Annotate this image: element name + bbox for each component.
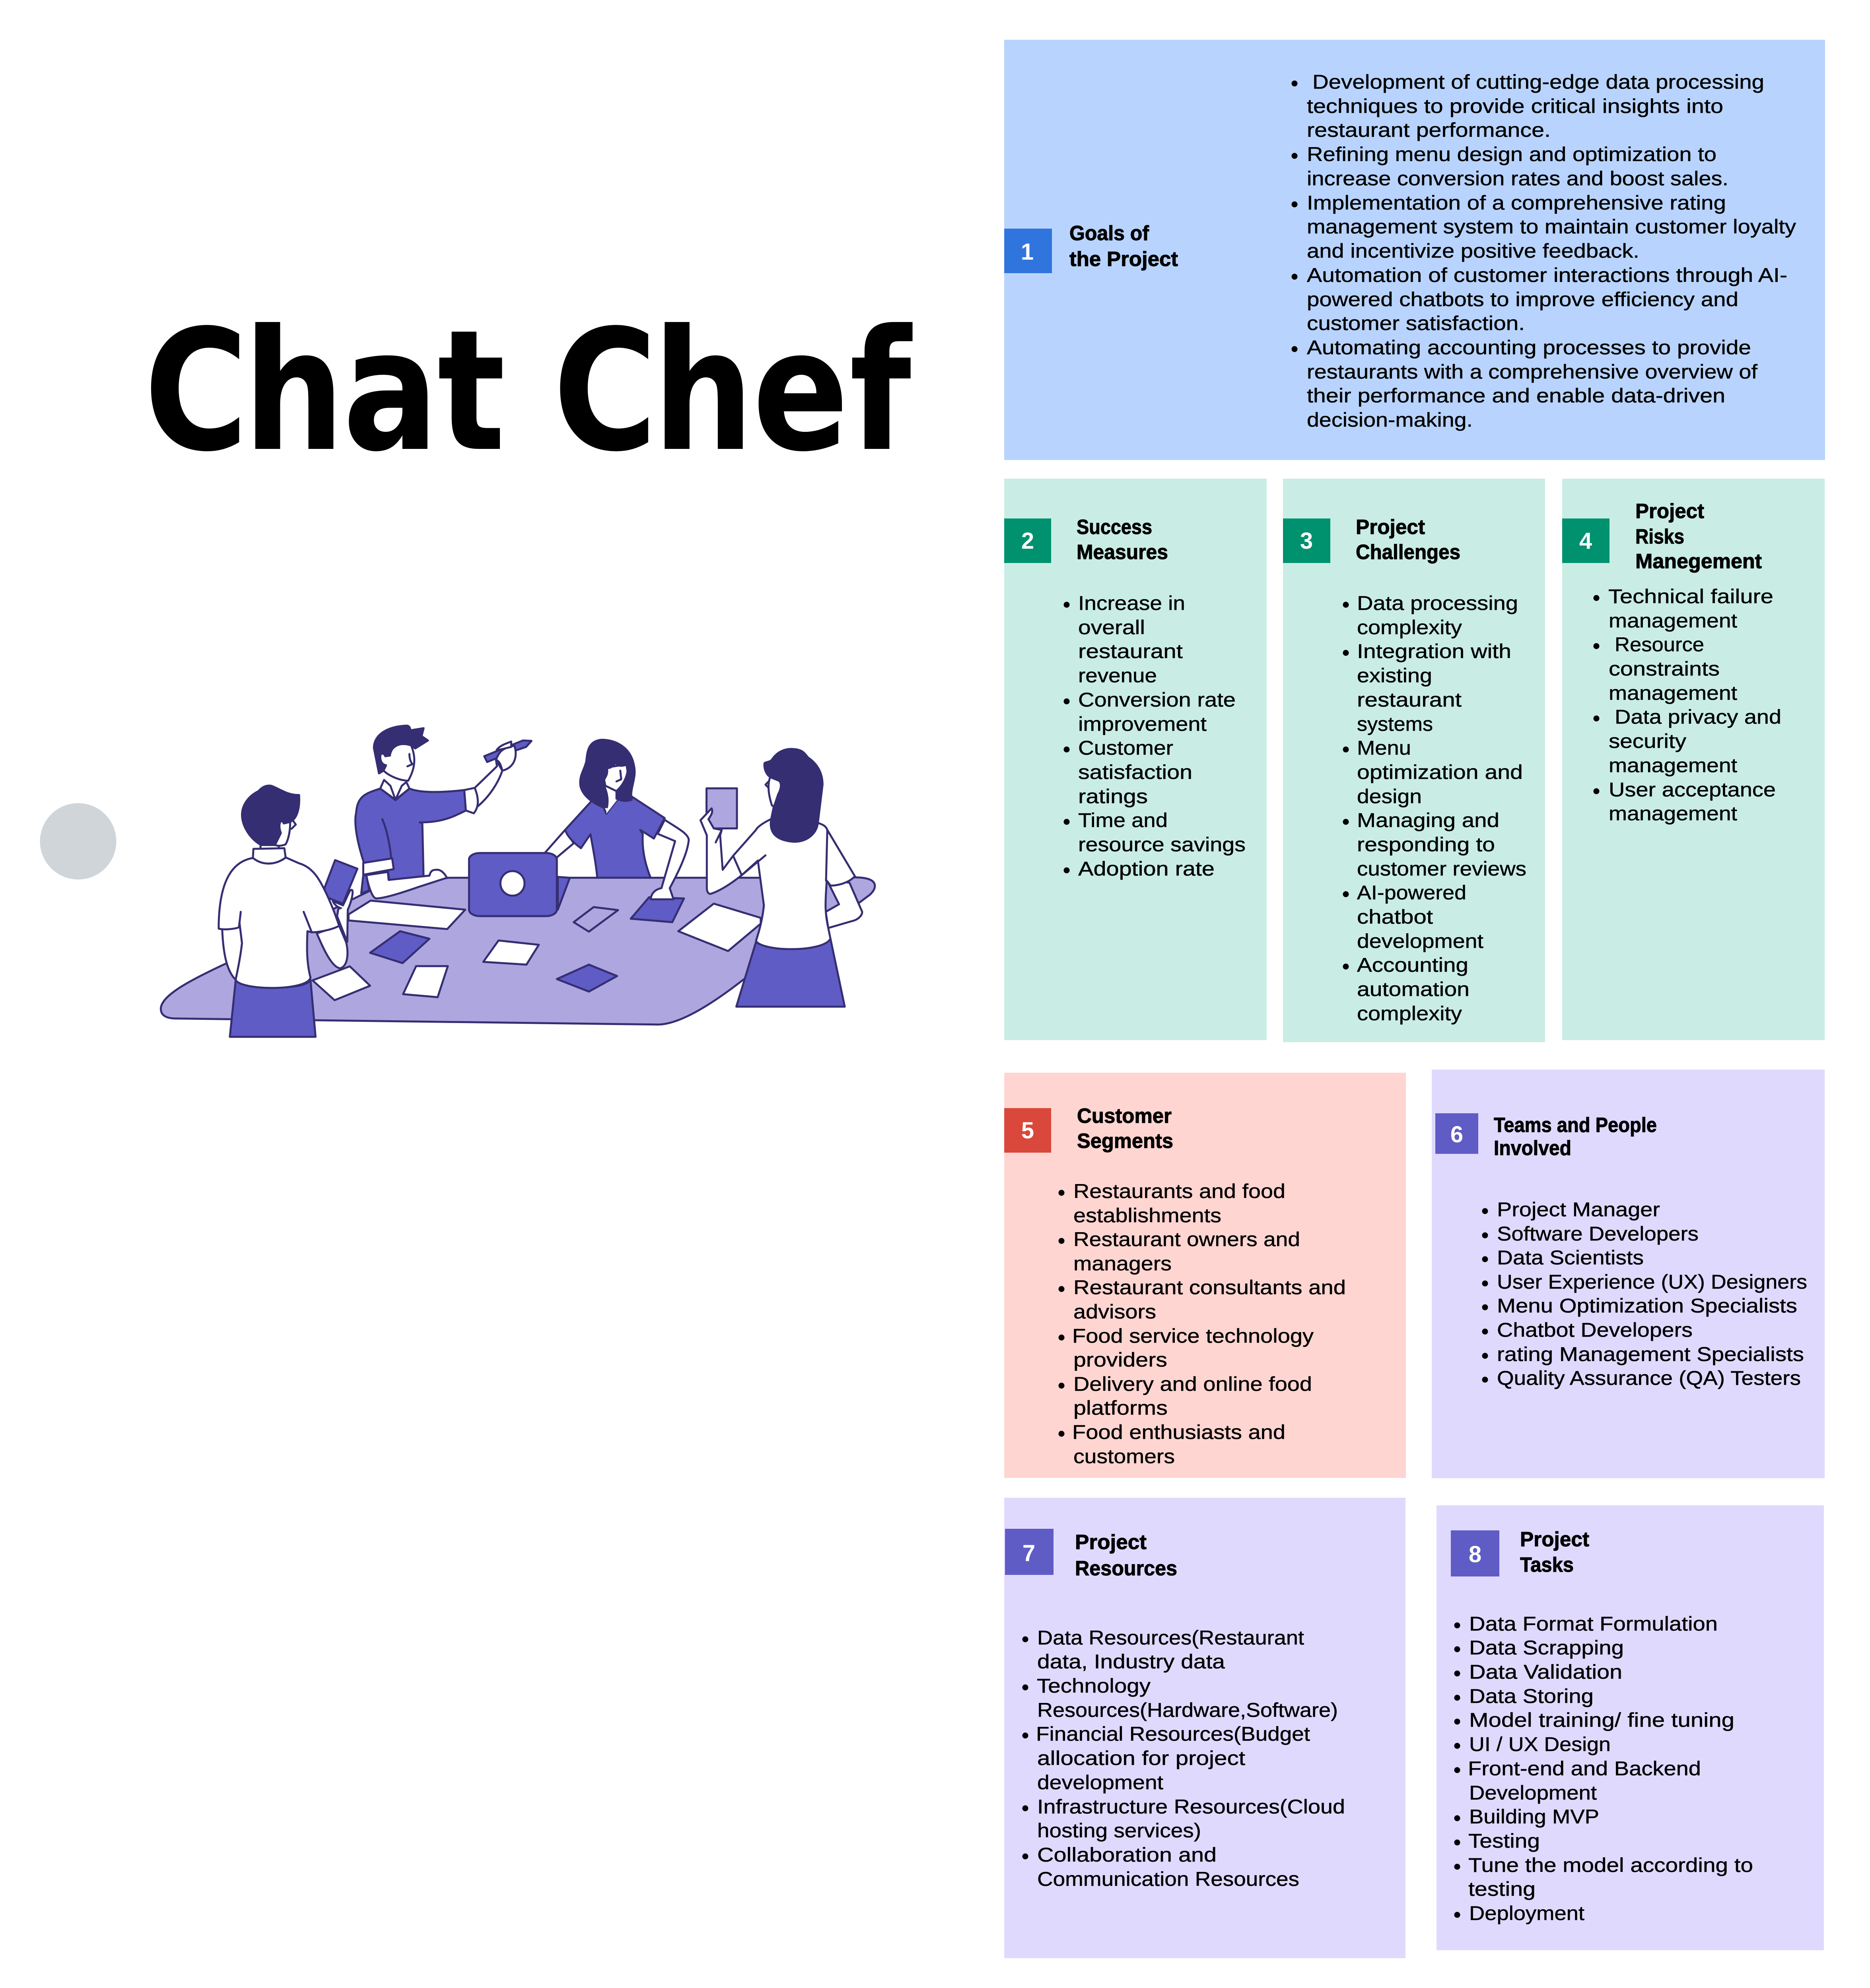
bullet list: existing xyxy=(1357,664,1432,687)
laptop xyxy=(469,853,570,916)
panel background xyxy=(1004,479,1267,1040)
bullet list: design xyxy=(1357,785,1422,808)
bullet list: restaurants with a comprehensive overview of xyxy=(1307,361,1757,383)
number badge 8 xyxy=(1451,1530,1499,1576)
heading xyxy=(1494,1114,1657,1160)
bullet list: Menu xyxy=(1357,737,1411,759)
panel 2: success measures xyxy=(1004,479,1267,1040)
paper: long white sheet xyxy=(348,901,465,929)
heading: Measures xyxy=(1077,541,1168,564)
bullet list xyxy=(1022,1627,1345,1890)
number badge 3 xyxy=(1283,518,1330,563)
heading: Tasks xyxy=(1520,1553,1574,1576)
bullet list: decision-making. xyxy=(1307,409,1473,431)
bullet list: Data processing xyxy=(1357,592,1518,614)
bullet list: Software Developers xyxy=(1497,1223,1699,1245)
number badge 7: 7 xyxy=(1022,1540,1035,1566)
bullet list: Data Storing xyxy=(1469,1685,1594,1707)
bullet list: restaurant performance. xyxy=(1307,119,1551,141)
man's shirt cuff xyxy=(363,858,394,875)
bullet list xyxy=(1454,1613,1753,1924)
panel 1: goals of the project xyxy=(1004,40,1825,460)
bullet list: Food enthusiasts and xyxy=(1072,1421,1285,1443)
person: man's raised arm and pen xyxy=(464,740,531,813)
heading: Teams and People xyxy=(1494,1114,1657,1137)
panel background xyxy=(1004,1073,1406,1478)
bullet list: data, Industry data xyxy=(1037,1650,1225,1673)
bullet list: Tune the model according to xyxy=(1468,1854,1753,1876)
paper: white square xyxy=(483,940,539,965)
panel background xyxy=(1004,40,1825,460)
panel background xyxy=(1437,1505,1824,1950)
paper: outline card xyxy=(573,907,618,932)
number badge 4: 4 xyxy=(1579,528,1592,554)
bullet list: development xyxy=(1037,1771,1163,1794)
bullet list: Financial Resources(Budget xyxy=(1036,1723,1310,1745)
heading xyxy=(1077,516,1168,564)
bullet list: Collaboration and xyxy=(1037,1844,1217,1866)
bullet list: customer satisfaction. xyxy=(1307,312,1525,334)
bullet list xyxy=(1292,71,1796,431)
bullet list: customers xyxy=(1073,1445,1175,1468)
heading: Resources xyxy=(1075,1557,1177,1580)
bullet list: Resource xyxy=(1615,633,1704,656)
bullet list xyxy=(1059,1180,1346,1468)
bullet list: testing xyxy=(1468,1878,1536,1900)
bullet list: complexity xyxy=(1357,616,1462,639)
bullet list: revenue xyxy=(1078,664,1157,687)
bullet list: management xyxy=(1609,682,1737,704)
bullet list: satisfaction xyxy=(1078,761,1192,783)
bullet list: security xyxy=(1609,730,1686,752)
bullet list: Restaurant consultants and xyxy=(1073,1276,1346,1299)
heading: Project xyxy=(1356,516,1425,539)
heading: Manegement xyxy=(1635,550,1762,573)
bullet list: providers xyxy=(1073,1349,1167,1371)
title: Chat Chef xyxy=(144,294,914,488)
bullet list: Development of cutting-edge data processing xyxy=(1312,71,1764,93)
bullet list: ratings xyxy=(1078,785,1148,808)
bullet list: increase conversion rates and boost sales. xyxy=(1307,167,1728,190)
bullet list: powered chatbots to improve efficiency and xyxy=(1307,288,1738,311)
bullet list xyxy=(1063,592,1246,880)
bullet list: advisors xyxy=(1073,1301,1156,1323)
bullet list: AI-powered xyxy=(1357,881,1466,904)
bullet list xyxy=(1593,585,1781,825)
bullet list: overall xyxy=(1078,616,1145,639)
bullet list xyxy=(1482,1198,1807,1389)
bullet list: development xyxy=(1357,930,1483,952)
heading: the Project xyxy=(1069,248,1178,271)
bullet list: restaurant xyxy=(1078,640,1183,662)
bullet list: Delivery and online food xyxy=(1073,1373,1312,1395)
bullet list: management xyxy=(1609,754,1737,777)
bullet list: Menu Optimization Specialists xyxy=(1497,1295,1797,1317)
decorative grey circle xyxy=(40,803,116,879)
panel 6: teams and people involved xyxy=(1432,1070,1825,1478)
table top xyxy=(161,858,875,1025)
bullet list xyxy=(1343,592,1526,1025)
number badge 1: 1 xyxy=(1021,239,1034,265)
bullet list: Restaurants and food xyxy=(1073,1180,1285,1202)
illustration: team around a table xyxy=(161,726,875,1037)
bullet list: Conversion rate xyxy=(1078,689,1236,711)
heading xyxy=(1069,222,1178,271)
bullet list: Data Scrapping xyxy=(1469,1637,1624,1659)
bullet list: UI / UX Design xyxy=(1469,1733,1611,1755)
bullet list: Quality Assurance (QA) Testers xyxy=(1497,1367,1801,1389)
heading xyxy=(1635,500,1762,573)
paper: blue diamond xyxy=(557,965,617,992)
paper: white card lower xyxy=(403,966,448,997)
heading: Project xyxy=(1075,1531,1147,1554)
tablet in hand xyxy=(325,860,358,904)
person: woman holding a card xyxy=(700,749,862,1007)
heading: Project xyxy=(1520,1528,1589,1551)
panel background xyxy=(1432,1070,1825,1478)
bullet list: Model training/ fine tuning xyxy=(1469,1709,1734,1731)
bullet list: management xyxy=(1609,610,1737,632)
bullet list: rating Management Specialists xyxy=(1497,1343,1804,1365)
number badge 1 xyxy=(1004,229,1052,273)
bullet list: Restaurant owners and xyxy=(1073,1228,1300,1250)
panel 7: project resources xyxy=(1004,1498,1405,1958)
panel 4: project risks management xyxy=(1562,479,1825,1040)
heading: Challenges xyxy=(1356,541,1460,564)
number badge 4 xyxy=(1562,518,1610,563)
number badge 6: 6 xyxy=(1450,1122,1463,1147)
heading: Success xyxy=(1077,516,1152,539)
number badge 2 xyxy=(1004,518,1051,563)
bullet list: Testing xyxy=(1468,1830,1540,1852)
bullet list: responding to xyxy=(1357,833,1495,856)
bullet list: Adoption rate xyxy=(1078,858,1215,880)
bullet list: Resources(Hardware,Software) xyxy=(1037,1699,1338,1721)
number badge 6 xyxy=(1435,1113,1478,1154)
held card xyxy=(706,788,737,829)
person: woman in the middle xyxy=(545,740,665,879)
person: man with pen, upper body xyxy=(356,726,466,880)
bullet list: restaurant xyxy=(1357,689,1462,711)
paper: large white sheet right xyxy=(678,904,761,951)
woman's arm on table xyxy=(651,820,689,899)
bullet list: allocation for project xyxy=(1037,1747,1245,1769)
heading: Segments xyxy=(1077,1130,1173,1153)
bullet list: managers xyxy=(1073,1252,1172,1275)
number badge 8: 8 xyxy=(1469,1541,1481,1567)
heading: Customer xyxy=(1077,1105,1172,1128)
bullet list: constraints xyxy=(1609,658,1720,680)
bullet list: platforms xyxy=(1073,1397,1168,1419)
table objects xyxy=(403,820,761,997)
bullet list: management system to maintain customer loyalty xyxy=(1307,215,1796,238)
bullet list: resource savings xyxy=(1078,833,1246,856)
paper: white sheet by man xyxy=(313,966,370,1000)
man's forearm on table xyxy=(366,870,447,899)
bullet list: chatbot xyxy=(1357,906,1433,928)
paper: blue card under hand xyxy=(631,897,684,922)
bullet list: Technical failure xyxy=(1608,585,1773,608)
bullet list: Development xyxy=(1469,1782,1597,1804)
bullet list: Time and xyxy=(1078,809,1168,831)
bullet list: Building MVP xyxy=(1469,1806,1599,1828)
bullet list: Customer xyxy=(1078,737,1173,759)
bullet list: establishments xyxy=(1073,1204,1221,1227)
heading: Project xyxy=(1635,500,1704,523)
bullet list: Data Validation xyxy=(1469,1661,1622,1683)
bullet list: Data Resources(Restaurant xyxy=(1037,1627,1304,1649)
bullet list: Accounting xyxy=(1357,954,1468,976)
bullet list: Implementation of a comprehensive rating xyxy=(1307,192,1726,214)
bullet list: Automating accounting processes to provide xyxy=(1307,336,1751,359)
bullet list: techniques to provide critical insights into xyxy=(1307,95,1723,117)
bullet list: User Experience (UX) Designers xyxy=(1497,1271,1807,1293)
heading xyxy=(1077,1105,1173,1153)
heading: Involved xyxy=(1494,1137,1571,1160)
bullet list: complexity xyxy=(1357,1002,1462,1025)
bullet list: Increase in xyxy=(1078,592,1185,614)
bullet list: systems xyxy=(1357,713,1433,735)
panel 8: project tasks xyxy=(1437,1505,1824,1950)
panel background xyxy=(1004,1498,1405,1958)
bullet list: Project Manager xyxy=(1497,1198,1660,1221)
bullet list: Food service technology xyxy=(1072,1325,1314,1347)
bullet list: hosting services) xyxy=(1037,1819,1201,1842)
bullet list: management xyxy=(1609,802,1737,825)
bullet list: User acceptance xyxy=(1609,779,1776,801)
heading xyxy=(1075,1531,1177,1580)
bullet list: Data privacy and xyxy=(1615,706,1781,728)
bullet list: Managing and xyxy=(1357,809,1499,831)
number badge 3: 3 xyxy=(1300,528,1313,554)
bullet list: Automation of customer interactions through AI- xyxy=(1307,264,1787,286)
number badge 5: 5 xyxy=(1021,1118,1034,1143)
number badge 5 xyxy=(1004,1108,1051,1153)
number badge 7 xyxy=(1005,1529,1054,1575)
panel 3: project challenges xyxy=(1283,479,1545,1042)
bullet list: Chatbot Developers xyxy=(1497,1319,1693,1341)
far arm on hip xyxy=(826,879,862,928)
person: seated man seen from behind xyxy=(219,786,358,1037)
number badge 2: 2 xyxy=(1021,528,1034,554)
bullet list: Communication Resources xyxy=(1037,1868,1299,1890)
bullet list: their performance and enable data-driven xyxy=(1307,384,1725,407)
heading: Goals of xyxy=(1069,222,1149,245)
bullet list: Data Scientists xyxy=(1497,1246,1644,1269)
panel 5: customer segments xyxy=(1004,1073,1406,1478)
paper: blue card left xyxy=(370,931,430,963)
bullet list: and incentivize positive feedback. xyxy=(1307,240,1639,262)
bullet list: improvement xyxy=(1078,713,1207,735)
bullet list: automation xyxy=(1357,978,1470,1000)
bullet list: Front-end and Backend xyxy=(1468,1757,1701,1780)
heading xyxy=(1356,516,1460,564)
bullet list: customer reviews xyxy=(1357,858,1526,880)
heading: Risks xyxy=(1635,525,1684,548)
heading xyxy=(1520,1528,1589,1576)
bullet list: Deployment xyxy=(1469,1902,1584,1924)
bullet list: Refining menu design and optimization to xyxy=(1307,143,1716,165)
panel background xyxy=(1562,479,1825,1040)
panel background xyxy=(1283,479,1545,1042)
bullet list: Integration with xyxy=(1357,640,1511,662)
bullet list: Infrastructure Resources(Cloud xyxy=(1037,1796,1345,1818)
bullet list: Technology xyxy=(1037,1675,1151,1697)
bullet list: Data Format Formulation xyxy=(1469,1613,1718,1635)
bullet list: optimization and xyxy=(1357,761,1523,783)
